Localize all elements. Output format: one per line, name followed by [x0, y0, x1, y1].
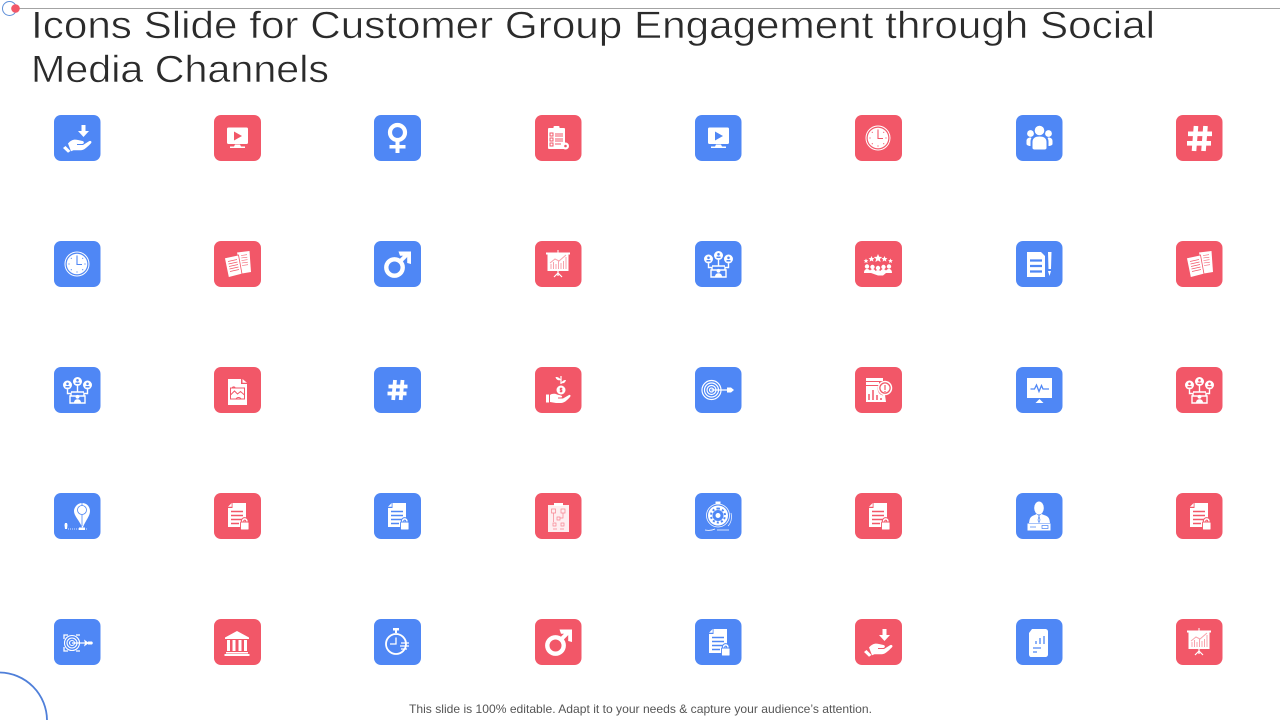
icon tile: hand with money plant, red [535, 367, 582, 413]
icon tile: papers, red [1176, 241, 1222, 287]
icon tile: bank building, red [214, 619, 261, 665]
icon tile: checklist clipboard, red [535, 115, 582, 161]
icon tile: locked document, red [1176, 493, 1222, 539]
icon tile: people network, blue [695, 241, 742, 287]
icon tile: locked document, blue [374, 493, 421, 539]
icon tile: document with exclamation, blue [1016, 241, 1062, 287]
icon tile: people group, blue [1016, 115, 1062, 161]
icon tile: video monitor, red [214, 115, 261, 161]
icon tile: monitor with pulse line, blue [1016, 367, 1062, 413]
icon tile: locked document, red [214, 493, 261, 539]
icon tile: chart with magnifier, red [855, 367, 902, 413]
icon tile: video monitor, blue [695, 115, 742, 161]
icon tile: male symbol, blue [374, 241, 421, 287]
icon tile: target with arrow, blue [695, 367, 742, 413]
title: Icons Slide for Customer Group Engagement through Social [31, 5, 1155, 47]
icon tile: clipboard flow plan, red [535, 493, 582, 539]
title: Media Channels [31, 49, 329, 91]
icon tile: image file, red [214, 367, 261, 413]
icon tile: framed target with arrow, blue [54, 619, 100, 665]
icon tile: gear stopwatch, blue [695, 493, 742, 539]
icon tile: clock, blue [54, 241, 100, 287]
icon tile: people network, red [1176, 367, 1222, 413]
icon tile: hand receiving download, red [855, 619, 902, 665]
title [31, 5, 1155, 91]
icon tile: people network, blue [54, 367, 100, 413]
icon tile: stopwatch, blue [374, 619, 421, 665]
icon tile: male symbol, red [535, 619, 582, 665]
icon tile: location pin with walker, blue [54, 493, 100, 539]
icon tile: papers, red [214, 241, 261, 287]
icon tile: female symbol, blue [374, 115, 421, 161]
icon tile: presentation chart, red [1176, 619, 1222, 665]
icon tile: locked document, blue [695, 619, 742, 665]
icon tile: presentation chart, red [535, 241, 582, 287]
icon tile: document with chart, blue [1016, 619, 1062, 665]
icon tile: small hashtag, blue [374, 367, 421, 413]
icon tile: hashtag, red [1176, 115, 1222, 161]
icon tile: hand receiving download, blue [54, 115, 100, 161]
top decoration: line with circle and dot [2, 2, 1280, 16]
icon tile: person at desk, blue [1016, 493, 1062, 539]
icon tile: clock, red [855, 115, 902, 161]
bottom-left decorative arc [0, 672, 47, 720]
icon tile: star-rated team, red [855, 241, 902, 287]
footer note: This slide is 100% editable. Adapt it to your needs & capture your audience’s attention. [409, 702, 872, 716]
icon tile: locked document, red [855, 493, 902, 539]
